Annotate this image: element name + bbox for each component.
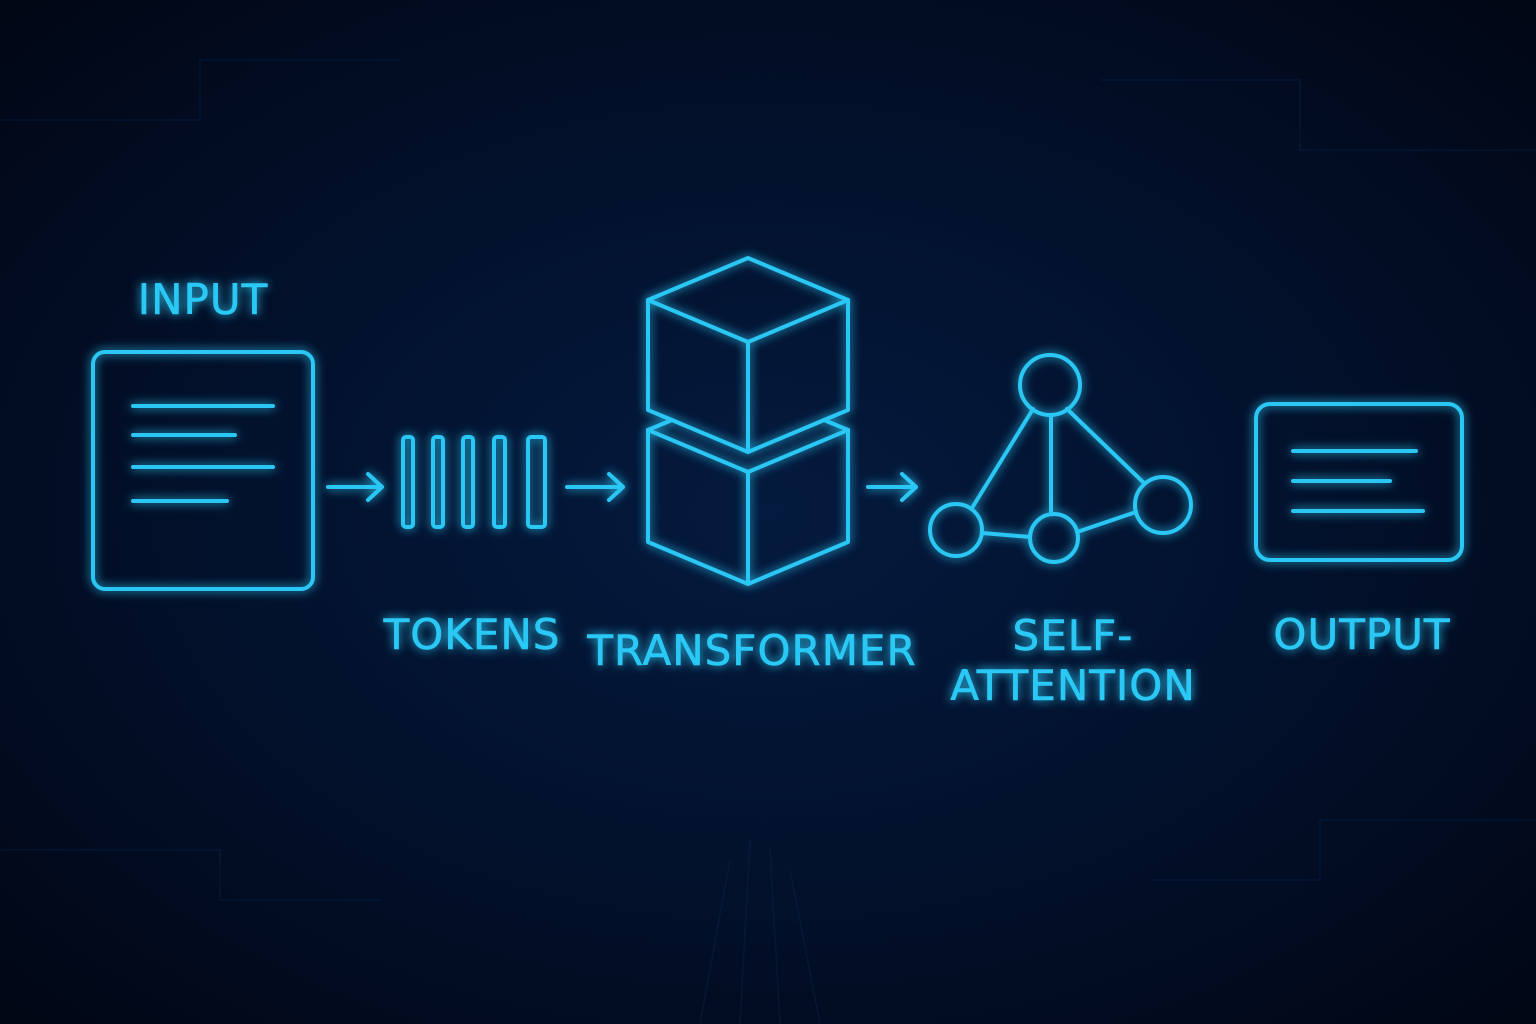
label: self-attention: ATTENTION [950, 661, 1196, 710]
arrow: input to tokens [328, 474, 382, 500]
icon: input document [93, 352, 313, 589]
label: tokens: TOKENS [383, 610, 560, 659]
icon: output box [1256, 404, 1462, 560]
arrow: tokens to transformer [567, 474, 623, 500]
icon: tokens [403, 437, 545, 527]
icon: transformer cubes [648, 258, 848, 584]
label: input: INPUT [138, 275, 268, 324]
label: self-attention: SELF- [1013, 611, 1133, 660]
label: transformer: TRANSFORMER [586, 626, 917, 675]
label: output: OUTPUT [1273, 610, 1451, 659]
icon: self-attention graph [930, 355, 1191, 562]
arrow: transformer to self-attention [868, 474, 916, 500]
